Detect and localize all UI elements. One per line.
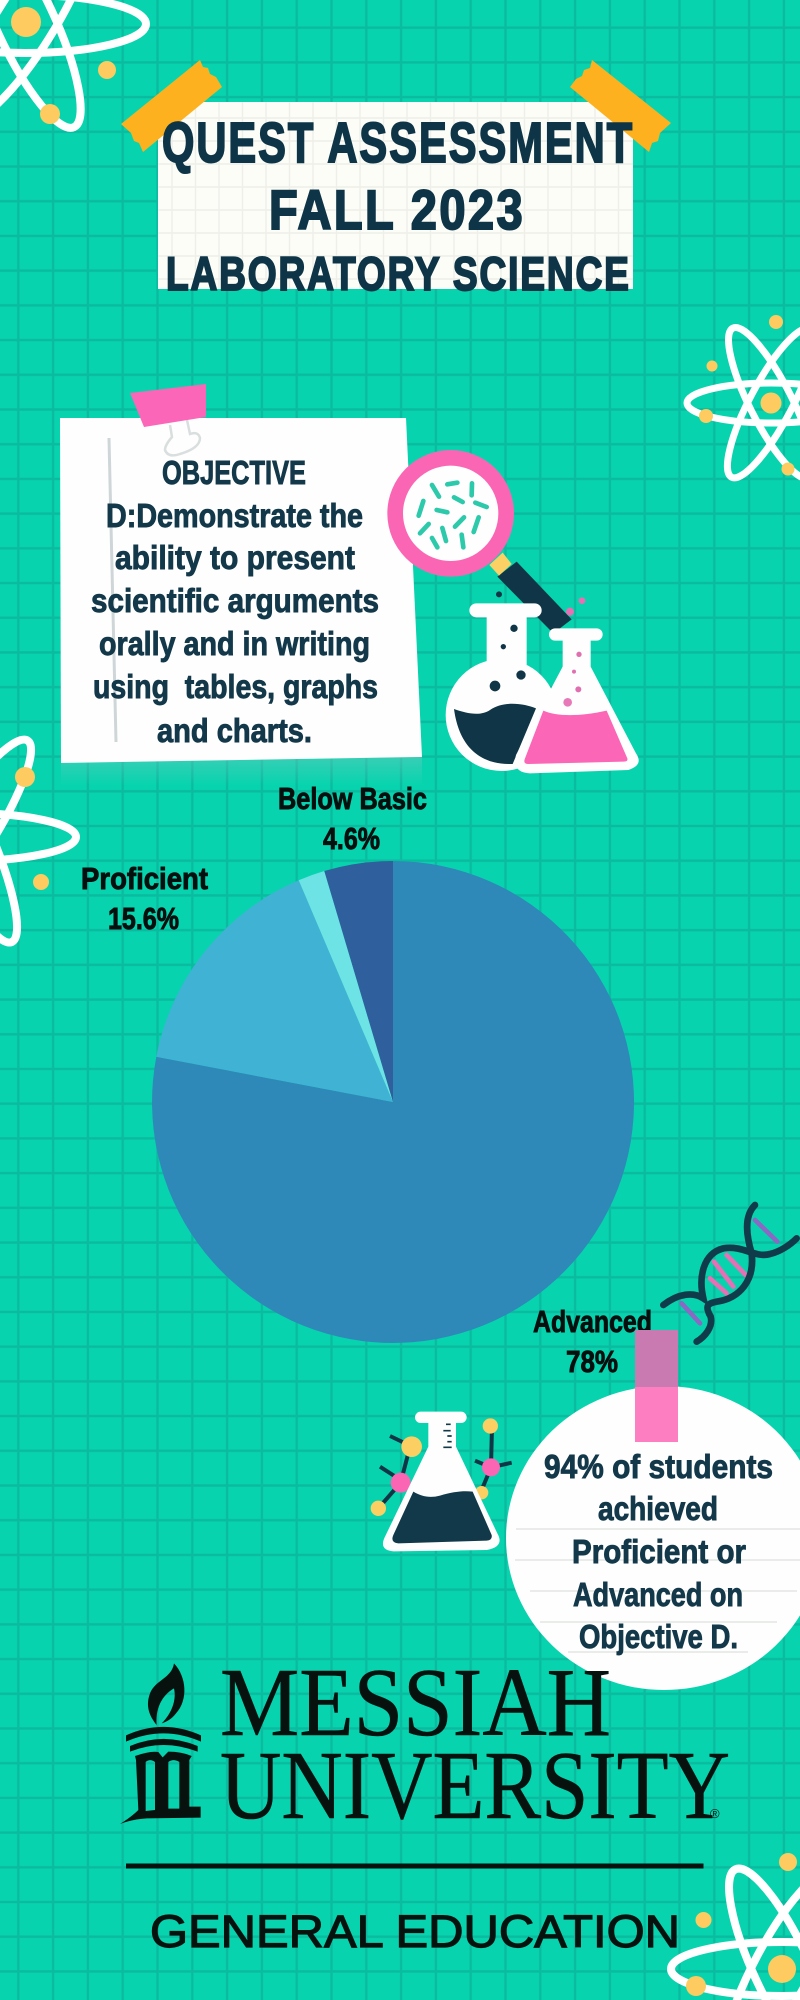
magnifier handle xyxy=(497,562,572,633)
objective text: orally and in writing xyxy=(99,625,370,662)
callout: 94% circle xyxy=(506,1330,800,1690)
conical flask xyxy=(515,628,639,773)
slice: Below Basic 4.6% xyxy=(324,861,393,1102)
paper sheet xyxy=(60,418,422,763)
magnifier lens xyxy=(387,450,514,577)
callout text: 94% of students xyxy=(544,1448,773,1485)
flask body xyxy=(383,1420,500,1551)
tape left xyxy=(121,60,222,152)
icon: DNA helix xyxy=(663,1205,797,1342)
objective text xyxy=(91,454,379,749)
label: Advanced: 78% xyxy=(566,1344,618,1379)
label: Below Basic: 4.6% xyxy=(323,821,380,856)
tape right xyxy=(570,60,671,152)
title line 3: LABORATORY SCIENCE xyxy=(166,248,629,300)
title paper xyxy=(158,102,633,289)
binder clip loop xyxy=(165,420,200,455)
title line 1: QUEST ASSESSMENT xyxy=(162,111,632,175)
bacteria xyxy=(419,483,487,547)
panel: objective note xyxy=(60,384,422,785)
divider line xyxy=(126,1864,704,1868)
molecule right xyxy=(475,1418,512,1499)
pie chart xyxy=(152,861,634,1343)
objective text: ability to present xyxy=(115,539,355,576)
label: Below Basic xyxy=(278,781,427,856)
binder clip xyxy=(130,384,206,427)
callout text: Advanced on xyxy=(573,1576,743,1613)
objective text: D:Demonstrate the xyxy=(106,497,363,534)
callout text: Objective D. xyxy=(579,1618,738,1655)
icon: atom left middle xyxy=(0,722,76,952)
label: Proficient: Proficient xyxy=(81,861,208,896)
icon: small flask with molecules xyxy=(371,1412,512,1551)
icon: atom top right xyxy=(687,315,800,487)
logo torch xyxy=(120,1663,201,1824)
ruled lines xyxy=(515,1529,800,1652)
title card xyxy=(121,60,671,300)
margin line xyxy=(109,438,116,742)
circle paper xyxy=(506,1386,800,1690)
footer: General Education: GENERAL EDUCATION xyxy=(150,1906,680,1957)
sparks xyxy=(566,608,574,616)
objective text: using tables, graphs xyxy=(93,668,378,705)
pink tape xyxy=(635,1387,678,1442)
callout text: achieved xyxy=(598,1490,718,1527)
icon: atom bottom right xyxy=(671,1853,800,2000)
round flask xyxy=(446,603,558,771)
label: Advanced: Advanced xyxy=(533,1304,652,1339)
title line 2: FALL 2023 xyxy=(269,178,523,241)
slice: Proficient 15.6% xyxy=(156,880,393,1102)
slice: Advanced 78% xyxy=(152,861,634,1343)
label: Below Basic: Below Basic xyxy=(278,781,427,816)
objective text: OBJECTIVE xyxy=(162,454,306,491)
molecule left xyxy=(371,1436,422,1516)
wordmark MESSIAH: MESSIAH xyxy=(220,1649,611,1757)
slice: Basic 1.8% xyxy=(299,871,393,1102)
callout text xyxy=(544,1448,773,1655)
icon: atom top left xyxy=(0,0,146,139)
label: Proficient: 15.6% xyxy=(108,901,179,936)
registered mark: ® xyxy=(710,1806,720,1821)
logo: Messiah University xyxy=(120,1649,730,1840)
paper shadow xyxy=(61,757,422,785)
icon: magnifier and flasks xyxy=(387,450,639,773)
label: Proficient xyxy=(81,861,208,936)
callout text: Proficient or xyxy=(572,1533,746,1570)
label: Advanced xyxy=(533,1304,652,1379)
objective text: scientific arguments xyxy=(91,582,379,619)
wordmark UNIVERSITY: UNIVERSITY xyxy=(220,1732,730,1840)
objective text: and charts. xyxy=(157,712,312,749)
